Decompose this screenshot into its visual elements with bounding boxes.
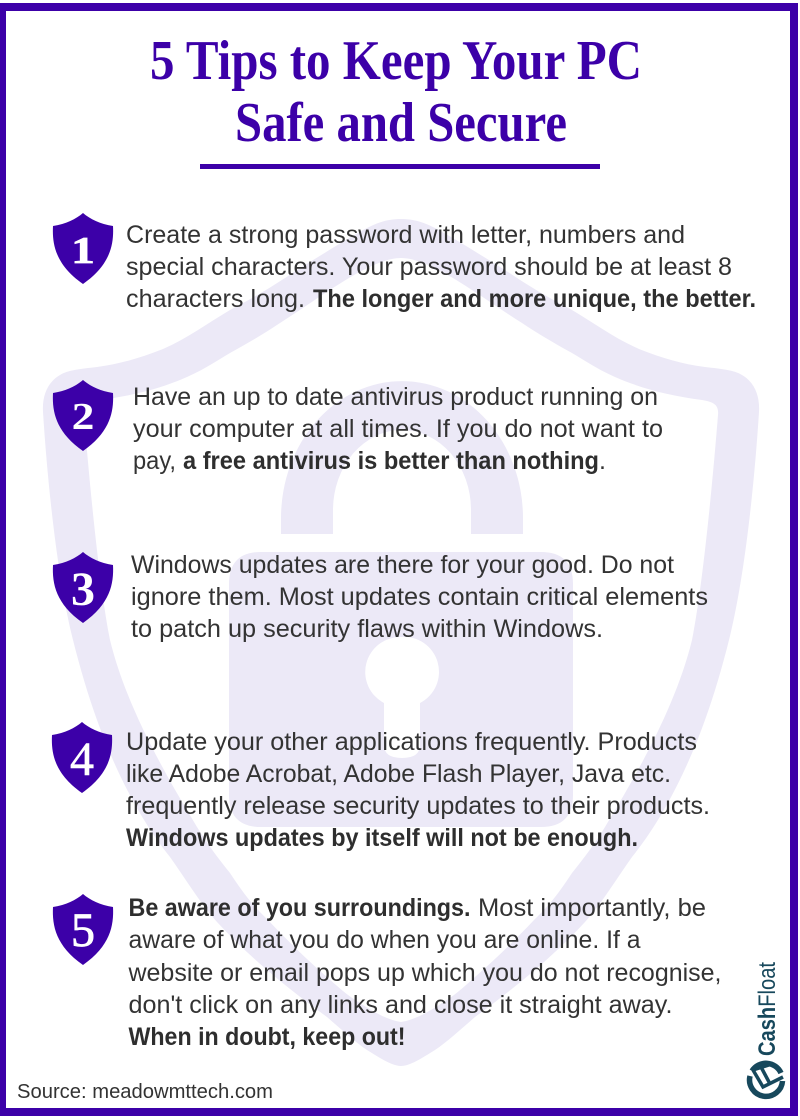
title: 5 Tips to Keep Your PC — [150, 30, 642, 92]
text block: tip 4 — [126, 728, 710, 852]
text block: tip 3: to patch up security flaws within Windows. — [131, 615, 603, 643]
icon: shield number 2 — [53, 380, 113, 451]
text block: tip 2: Have an up to date antivirus product running on — [133, 383, 658, 411]
text block: tip 2 — [133, 383, 663, 475]
title — [150, 30, 642, 154]
text block: tip 5: Most importantly, be — [478, 894, 706, 922]
icon: shield number 1 — [53, 213, 113, 284]
text block: tip 2: your computer at all times. If you do not want to — [133, 415, 663, 443]
tip 3 — [53, 551, 708, 643]
text block: tip 4: frequently release security updates to their products. — [126, 792, 710, 820]
source note: Source: meadowmttech.com — [17, 1081, 273, 1103]
text block: tip 2: a free antivirus is better than nothing — [183, 447, 599, 475]
title: Safe and Secure — [235, 92, 567, 154]
tip 4 — [52, 722, 710, 852]
watermark: shield with padlock — [43, 219, 759, 1066]
text block: tip 1: The longer and more unique, the better. — [313, 285, 756, 313]
shield outline — [43, 219, 759, 1066]
text block: tip 5: When in doubt, keep out! — [128, 1023, 406, 1051]
icon: shield number 3 — [53, 552, 113, 623]
text block: tip 5 — [128, 894, 722, 1051]
icon: shield number 4: 4 — [70, 733, 94, 786]
text block: tip 5: Be aware of you surroundings. — [128, 894, 470, 922]
text block: tip 5: don't click on any links and close it straight away. — [128, 991, 672, 1019]
text block: tip 4: Windows updates by itself will not be enough. — [126, 824, 638, 852]
text block: tip 5: aware of what you do when you are online. If a — [128, 926, 641, 954]
icon: shield number 1: 1 — [71, 230, 95, 272]
text block: tip 1 — [126, 221, 756, 313]
text block: tip 1: characters long. — [126, 285, 305, 313]
text block: tip 3: ignore them. Most updates contain critical elements — [131, 583, 708, 611]
text block: tip 4: like Adobe Acrobat, Adobe Flash Player, Java etc. — [126, 760, 671, 788]
logo: CashFloat — [750, 962, 783, 1096]
logo wordmark: CashFloat — [754, 962, 781, 1056]
text block: tip 1: special characters. Your password should be at least 8 — [126, 253, 732, 281]
text block: tip 1: Create a strong password with letter, numbers and — [126, 221, 685, 249]
icon: logo mark — [750, 1063, 783, 1096]
text block: tip 3: Windows updates are there for your good. Do not — [131, 551, 674, 579]
icon: shield number 5: 5 — [71, 904, 95, 957]
text block: tip 2: pay, — [133, 447, 176, 475]
icon: shield number 3: 3 — [71, 563, 95, 616]
title underline — [200, 164, 600, 169]
padlock body with keyhole — [229, 552, 573, 827]
text block: tip 2: . — [599, 447, 606, 475]
tip 1 — [53, 213, 756, 313]
padlock shackle — [281, 381, 523, 534]
icon: shield number 5 — [53, 894, 113, 965]
tip 5 — [53, 894, 722, 1051]
icon: shield number 4 — [52, 722, 112, 793]
text block: tip 5: website or email pops up which you do not recognise, — [128, 959, 722, 987]
icon: shield number 2: 2 — [72, 396, 94, 438]
tip 2 — [53, 380, 663, 475]
text block: tip 3 — [131, 551, 708, 643]
text block: tip 4: Update your other applications frequently. Products — [126, 728, 697, 756]
